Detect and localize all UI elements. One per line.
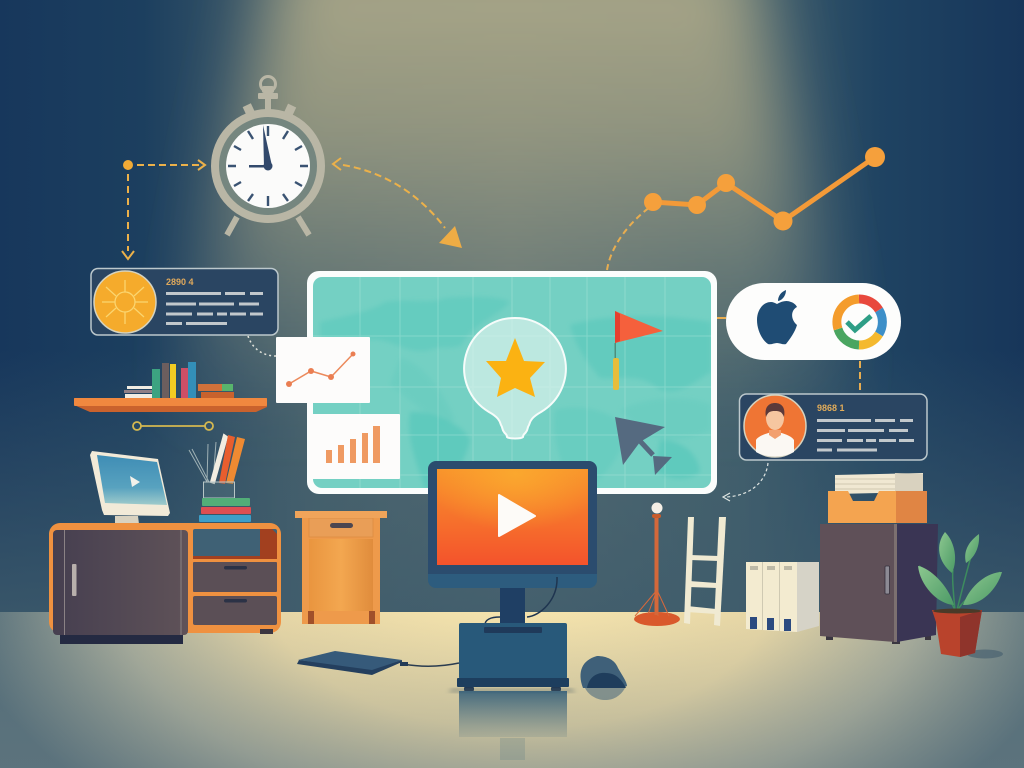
pill with app icons xyxy=(726,283,901,360)
card label: 2890 4 xyxy=(166,277,194,287)
panel: world map xyxy=(307,271,717,494)
info card right xyxy=(740,394,927,460)
monitor reflection on floor xyxy=(448,688,576,760)
filing cabinet xyxy=(820,524,938,644)
monitor stand box xyxy=(457,623,569,691)
icon: play triangle xyxy=(499,495,535,536)
card text lines xyxy=(817,419,914,452)
ladder xyxy=(684,517,726,626)
floor xyxy=(0,612,1024,768)
dashed arrow: clock to map xyxy=(333,158,462,248)
monitor cable xyxy=(485,577,557,625)
info card left xyxy=(91,268,278,335)
desk monitor xyxy=(90,451,170,524)
icon: orange idea badge xyxy=(94,271,156,333)
dashed connector: dot to clock and card xyxy=(122,160,205,259)
icon: stopwatch clock xyxy=(215,76,321,235)
chart card: bar chart xyxy=(309,414,400,479)
connector: map to pill xyxy=(717,317,726,319)
chart card: line chart xyxy=(276,337,370,403)
binders xyxy=(746,562,819,632)
world map landmasses xyxy=(320,297,711,490)
icon: paper plane xyxy=(615,417,672,475)
books on shelf xyxy=(124,362,234,398)
icon: light bulb with star xyxy=(464,318,566,438)
connector: pill to profile card xyxy=(859,361,861,394)
icon: coloured ring check xyxy=(837,299,882,345)
side table xyxy=(295,511,387,624)
dashed arrow: profile card to map xyxy=(723,463,768,501)
tray with papers xyxy=(828,473,927,523)
map grid xyxy=(313,277,711,490)
desk with cabinet and drawers xyxy=(49,523,281,644)
coat stand xyxy=(634,502,680,626)
icon: red flag xyxy=(613,311,663,390)
mouse xyxy=(581,656,627,700)
tablet with cable xyxy=(297,651,459,675)
dotted connector card to chart xyxy=(248,336,276,356)
main monitor with play button xyxy=(428,461,597,626)
slider connector xyxy=(133,422,213,430)
wall shelf with books xyxy=(74,362,267,412)
potted plant xyxy=(918,532,1003,658)
card label: 9868 1 xyxy=(817,403,845,413)
card text lines xyxy=(166,292,263,325)
line chart, top right xyxy=(607,147,885,270)
icon: star xyxy=(486,338,545,397)
icon: apple logo xyxy=(757,290,797,344)
icon: profile avatar xyxy=(744,395,806,457)
pen cup and stacked books xyxy=(189,435,251,522)
